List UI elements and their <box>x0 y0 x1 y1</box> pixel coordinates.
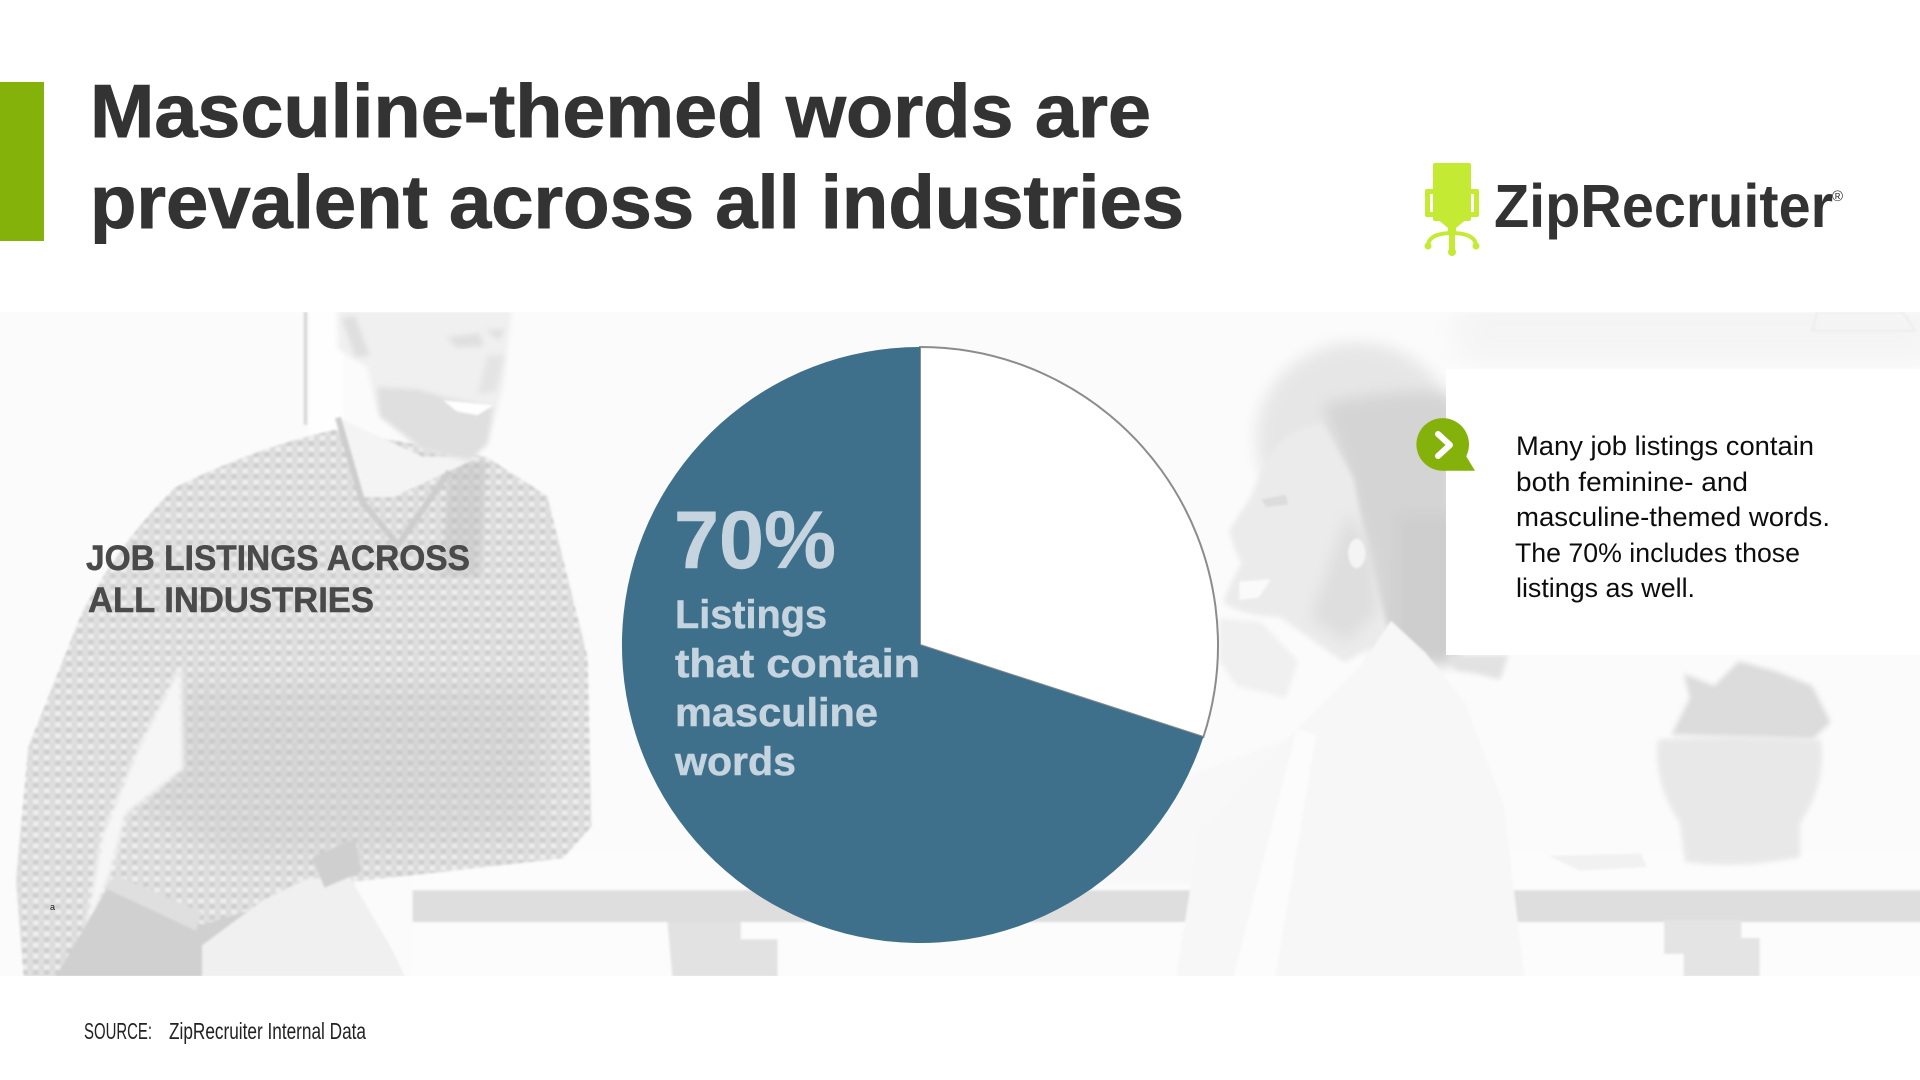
source line: ZipRecruiter Internal Data <box>169 1018 366 1044</box>
note text: listings as well. <box>1516 573 1695 603</box>
title <box>90 69 1184 244</box>
pie label: words <box>674 740 796 784</box>
pie label: that contain <box>675 642 920 686</box>
panel: greyscale office photo background <box>0 300 1920 988</box>
photo: table <box>412 890 1920 976</box>
heading: job listings across all industries: JOB LISTINGS ACROSS <box>86 539 470 578</box>
ZipRecruiter logo <box>1424 163 1843 256</box>
stray small letter: a <box>50 902 55 912</box>
pie label <box>674 495 920 784</box>
pie label: masculine <box>675 691 878 735</box>
pie chart: 70 percent masculine words <box>622 347 1218 943</box>
photo: window frame <box>303 312 308 426</box>
title accent bar <box>0 82 44 241</box>
icon: green speech bubble with chevron <box>1416 418 1475 471</box>
source line: SOURCE: <box>84 1018 152 1044</box>
note text: both feminine- and <box>1516 467 1748 497</box>
note text: Many job listings contain <box>1516 431 1814 461</box>
logo wordmark: ZipRecruiter <box>1494 172 1833 240</box>
pie label: Listings <box>675 593 827 637</box>
pie label: 70% <box>674 495 836 586</box>
pie slice: remaining 30 percent <box>920 347 1218 737</box>
title: prevalent across all industries <box>90 160 1184 244</box>
note text <box>1515 431 1830 603</box>
photo: man <box>16 300 591 988</box>
heading: job listings across all industries: ALL INDUSTRIES <box>88 581 374 620</box>
panel: note callout <box>1416 369 1920 655</box>
note text: The 70% includes those <box>1515 538 1800 568</box>
title: Masculine-themed words are <box>90 69 1151 153</box>
photo: woman <box>1102 343 1526 988</box>
pie slice: 70 percent <box>622 347 1203 943</box>
photo: potted plant <box>1549 661 1831 871</box>
note text: masculine-themed words. <box>1516 502 1830 532</box>
heading: job listings across all industries <box>86 539 470 620</box>
source line <box>84 1018 366 1044</box>
note background <box>1446 369 1920 655</box>
icon: green office chair <box>1424 163 1480 256</box>
registered mark: ® <box>1832 188 1843 205</box>
